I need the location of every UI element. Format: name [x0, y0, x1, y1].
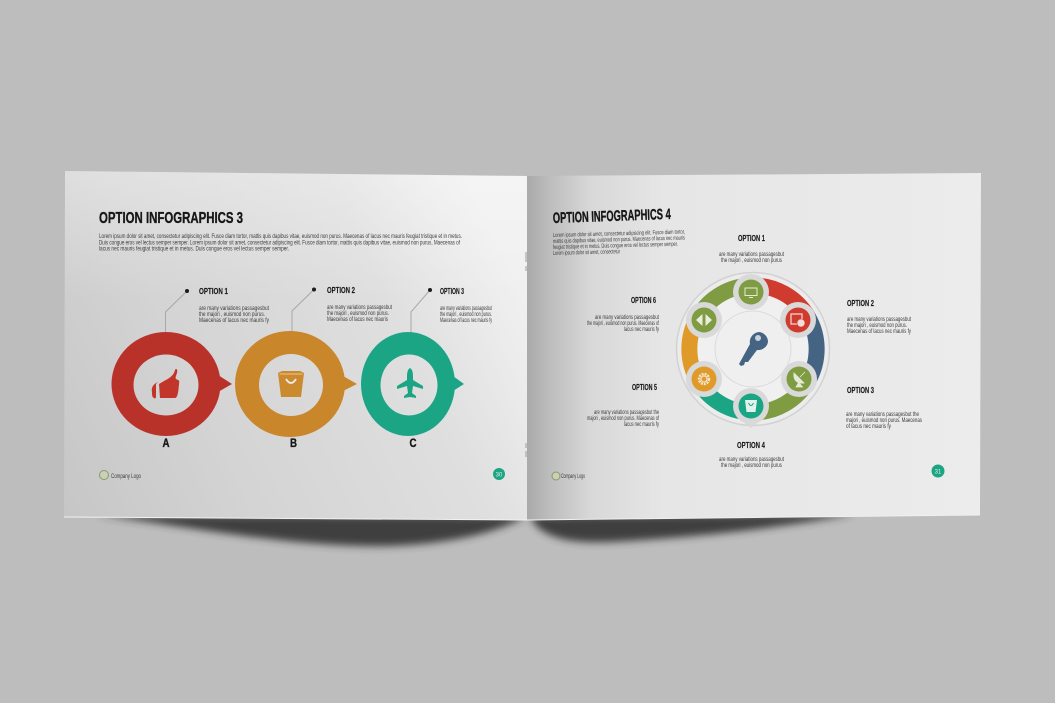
option 3 callout: [411, 286, 492, 333]
ring diagram: [676, 272, 830, 428]
letter C: C: [410, 436, 417, 450]
option 2 label: are many variations passagesbut: [847, 317, 911, 323]
icon: thumbs up: [152, 369, 179, 398]
option 2 label: [847, 298, 911, 335]
circle C: airplane: [361, 332, 464, 450]
icon: airplane: [397, 368, 423, 398]
intro text: Duis congue eros vel lectus semper semper. Lorem ipsum dolor sit amet, consectetur adipiscing elit. Fusce diam tortor, mattis quis dapibus vitae, euismod non purus, Maecenas of: [99, 240, 460, 246]
icon: shopping bag: [278, 371, 304, 397]
option 1 callout: Maecenas of lacus nec mauris fy: [199, 318, 269, 324]
option 1 callout: [166, 286, 269, 333]
option 5 label: lacus nec mauris fy: [624, 422, 659, 428]
option 1 label: OPTION 1: [738, 233, 765, 243]
option 3 callout: OPTION 3: [440, 286, 464, 296]
option 6 label: the majori , euismod non purus. Maecenas of: [587, 321, 659, 327]
page number 30: 30: [496, 472, 503, 478]
node: gear: [686, 361, 722, 397]
option 6 label: OPTION 6: [631, 295, 656, 305]
panel: left page: [64, 171, 527, 520]
option 1 callout: the majori , euismod non purus.: [199, 312, 265, 318]
page number 30: [493, 468, 505, 480]
circle A: thumbs up: [112, 332, 232, 450]
intro text: Lorem ipsum dolor sit amet, consectetur adipiscing elit. Fusce diam tortor,: [553, 230, 685, 239]
ring segment: orange: [689, 317, 698, 381]
intro text: feugiat tristique et in metus. Duis congue eros vel lectus semper semper.: [553, 242, 678, 251]
letter A: A: [162, 436, 170, 450]
node: web: [780, 302, 816, 338]
option 5 label: OPTION 5: [632, 382, 657, 392]
option 6 label: lacus nec mauris fy: [624, 327, 659, 333]
title: option infographics 3: OPTION INFOGRAPHICS 3: [99, 210, 243, 227]
company logo left: Company Logo: [111, 473, 141, 480]
option 2 label: OPTION 2: [847, 298, 874, 308]
option 1 callout: OPTION 1: [199, 286, 228, 296]
node: monitor: [733, 274, 769, 310]
intro text: mattis quis dapibus vitae, euismod non purus. Maecenas of lacus nec mauris: [553, 236, 685, 245]
option 4 label: OPTION 4: [737, 440, 765, 450]
option 3 label: are many variations passagesbut the: [846, 412, 919, 418]
intro text: [553, 230, 685, 257]
ring segment: red: [752, 285, 808, 317]
ring segment: green bottom right: [753, 381, 808, 413]
company logo right: [552, 472, 585, 480]
option 2 callout: Maecenas of lacus nec mauris: [327, 317, 388, 323]
option 3 callout: are many variations passagesbut: [440, 306, 492, 312]
option 3 callout: Maecenas of lacus nec mauris fy: [440, 318, 492, 324]
option 3 label: [846, 385, 922, 430]
node: bag: [733, 388, 769, 428]
option 6 label: [587, 295, 659, 333]
option 3 label: OPTION 3: [847, 385, 874, 395]
page number 31: [932, 464, 944, 478]
icon: key: [739, 332, 768, 366]
panel: right page: [527, 173, 981, 520]
option 3 label: majori , euismod non purus. Maecenas: [846, 418, 922, 424]
option 1 label: are many variations passagesbut: [719, 252, 784, 258]
option 1 callout: are many variations passagesbut: [199, 306, 269, 312]
option 5 label: are many variations passagesbut the: [594, 410, 659, 416]
option 5 label: [587, 382, 659, 428]
intro text: Lorem ipsum dolor sit amet, consectetur adipiscing elit. Fusce diam tortor, mattis quis dapibus vitae, euismod non purus. Maecenas of lacus nec mauris feugiat tristique et in metus.: [99, 234, 462, 240]
intro text: lacus nec mauris feugiat tristique et in metus. Duis congue eros vel lectus semper semper.: [99, 246, 289, 252]
option 2 label: Maecenas of lacus nec mauris fy: [847, 329, 911, 335]
option 2 callout: [292, 285, 392, 332]
node: satellite dish: [781, 361, 817, 397]
option 4 label: are many variations passagesbut: [719, 457, 784, 463]
spread: both pages: [64, 171, 981, 520]
option 2 callout: OPTION 2: [327, 285, 355, 295]
option 2 callout: the majori , euismod non purus.: [327, 311, 389, 317]
option 2 label: the majori , euismod non purus.: [847, 323, 907, 329]
page shadows: [96, 514, 855, 546]
company logo right: Company Logo: [561, 473, 585, 480]
letter B: B: [290, 436, 297, 450]
option 6 label: are many variations passagesbut: [595, 315, 659, 321]
ring segment: blue: [808, 317, 817, 381]
node: arrows: [686, 302, 722, 338]
page number 31: 31: [935, 470, 942, 476]
title: option infographics 4: OPTION INFOGRAPHICS 4: [553, 206, 671, 227]
ring segment: teal: [698, 381, 753, 413]
company logo left: [100, 470, 141, 480]
option 5 label: majori , euismod non purus. Maecenas of: [587, 416, 659, 422]
option 3 label: of lacus nec mauris fy: [846, 424, 891, 430]
option 3 callout: the majori , euismod non purus.: [440, 312, 492, 318]
option 1 label: [719, 233, 784, 264]
ring segment: green top left: [698, 286, 752, 317]
option 4 label: the majori , euismod non purus: [721, 463, 782, 469]
circle B: shopping bag: [235, 331, 357, 450]
intro text: Lorem ipsum dolor sit amet, consectetur: [553, 249, 620, 257]
intro text: [99, 234, 462, 252]
option 2 callout: are many variations passagesbut: [327, 305, 392, 311]
option 1 label: the majori , euismod non purus: [721, 258, 782, 264]
option 4 label: [719, 440, 784, 469]
center disc: [715, 311, 791, 387]
